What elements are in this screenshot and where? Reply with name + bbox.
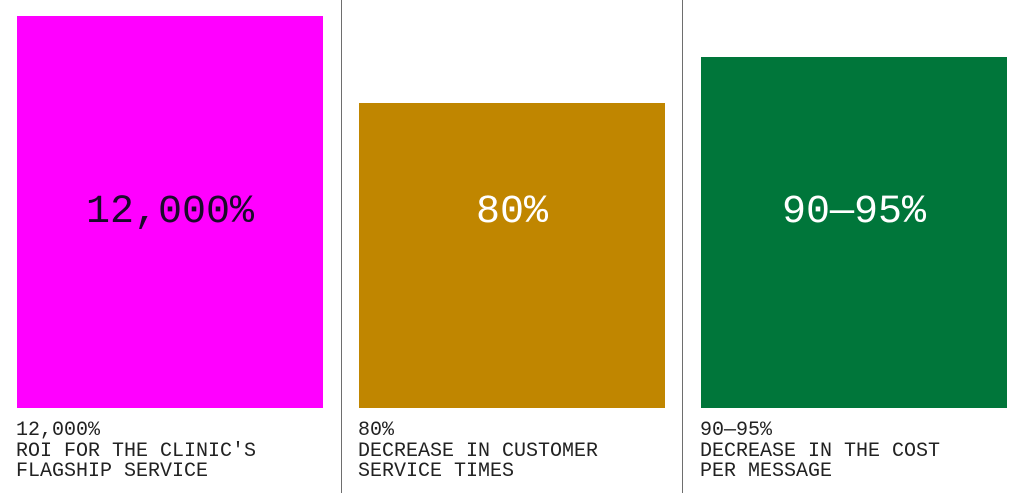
caption: cost per message: DECREASE IN THE COST (700, 440, 940, 462)
big number: 90-95%: 90—95% (782, 190, 926, 235)
caption: cost per message: 90—95% (700, 419, 772, 442)
caption: customer service: SERVICE TIMES (358, 460, 514, 483)
caption: customer service: DECREASE IN CUSTOMER (358, 440, 598, 462)
caption: customer service (358, 419, 598, 483)
panel: ROI stat bar (17, 16, 323, 408)
caption: ROI: FLAGSHIP SERVICE (16, 460, 208, 483)
caption: ROI: ROI FOR THE CLINIC'S (16, 440, 256, 462)
caption: cost per message: PER MESSAGE (700, 460, 832, 483)
caption: ROI: 12,000% (16, 419, 100, 442)
caption: cost per message (700, 419, 940, 483)
panel: cost per message stat bar (701, 57, 1007, 408)
caption: customer service: 80% (358, 419, 394, 442)
big number: 12,000%: 12,000% (86, 190, 254, 235)
big number: 80%: 80% (476, 190, 548, 235)
caption: ROI (16, 419, 256, 483)
panel: customer service stat bar (359, 102, 665, 408)
